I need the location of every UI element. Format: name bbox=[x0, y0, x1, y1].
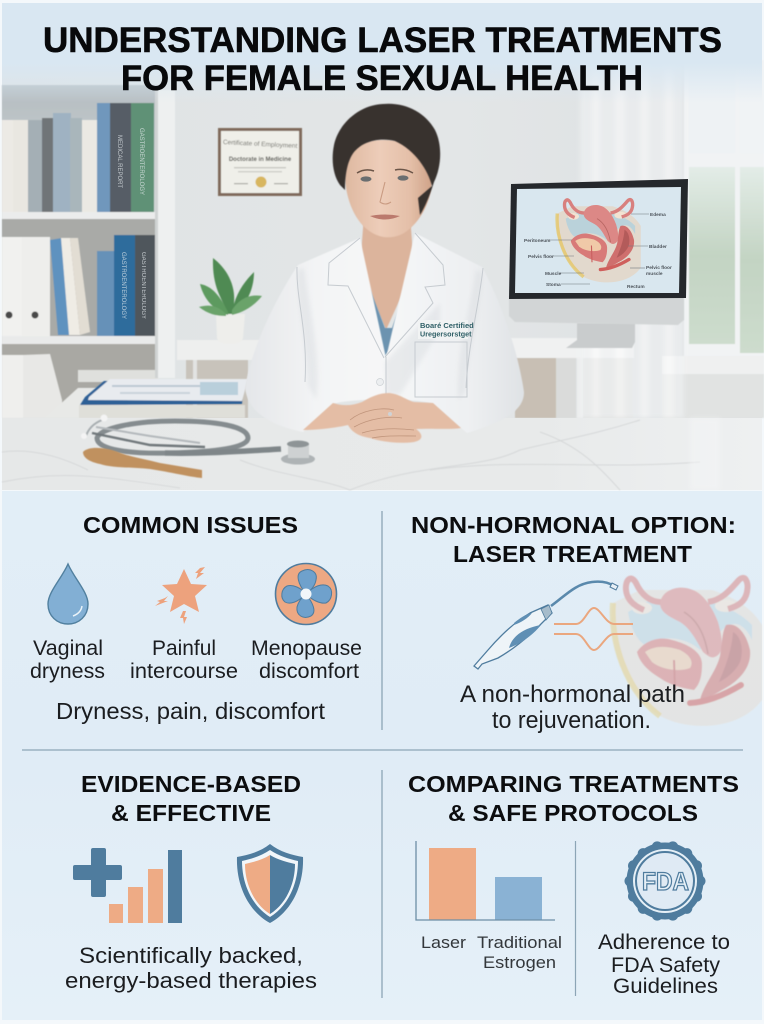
caption: FDA Safety bbox=[611, 954, 721, 977]
caption: A non-hormonal path bbox=[460, 681, 685, 708]
panel: evidence-based bbox=[65, 771, 317, 993]
heading bbox=[408, 771, 739, 826]
coat badge: Boaré Certified bbox=[420, 321, 474, 330]
heading: & SAFE PROTOCOLS bbox=[448, 800, 698, 826]
framed certificate: Certificate of Employment bbox=[223, 139, 298, 150]
icon labels: Vaginal bbox=[33, 637, 103, 660]
bar chart bbox=[416, 841, 555, 920]
panel: non-hormonal option bbox=[411, 512, 762, 734]
bookshelf bbox=[2, 85, 175, 418]
coat lapels and pocket bbox=[297, 233, 483, 403]
chart labels: Estrogen bbox=[483, 953, 556, 972]
screen labels: Rectum bbox=[627, 284, 645, 290]
neck bbox=[360, 215, 414, 330]
heading: COMPARING TREATMENTS bbox=[408, 771, 739, 797]
folded hands bbox=[303, 393, 461, 443]
heading: NON-HORMONAL OPTION: bbox=[411, 512, 736, 538]
chart labels: Traditional bbox=[477, 933, 562, 952]
book spine text: GASTROENTEROLOGY bbox=[140, 252, 146, 319]
icon labels: Painful bbox=[152, 637, 216, 660]
monitor screen bbox=[515, 187, 681, 293]
screen labels: Pelvis floor bbox=[528, 254, 554, 260]
caption: Guidelines bbox=[613, 975, 718, 998]
chart labels: Laser bbox=[421, 933, 466, 952]
heading: & EFFECTIVE bbox=[111, 800, 271, 826]
hero photo: clinic scene bbox=[2, 3, 764, 490]
monitor bezel bbox=[509, 179, 688, 299]
stethoscope bbox=[81, 414, 315, 464]
screen labels: Stoma bbox=[546, 282, 561, 288]
heading: LASER TREATMENT bbox=[453, 541, 693, 567]
anatomy diagram on screen bbox=[557, 200, 641, 282]
potted plant bbox=[199, 258, 262, 344]
heading: COMMON ISSUES bbox=[83, 512, 298, 538]
icon labels: discomfort bbox=[259, 660, 359, 683]
face bbox=[345, 140, 432, 237]
white coat bbox=[245, 233, 524, 433]
icon labels: dryness bbox=[30, 660, 105, 683]
caption bbox=[460, 681, 685, 734]
facial features bbox=[357, 169, 413, 220]
back wall bbox=[2, 60, 762, 420]
faded anatomy illustration bbox=[612, 578, 762, 726]
icon: medical cross bbox=[73, 848, 122, 897]
screen labels: muscle bbox=[646, 271, 663, 277]
book spine text: GASTROENTEROLOGY bbox=[120, 252, 126, 319]
folder stack on desk bbox=[79, 379, 248, 418]
icon: FDA seal bbox=[624, 841, 706, 921]
doctor bbox=[245, 104, 524, 443]
caption: to rejuvenation. bbox=[492, 707, 651, 734]
caption: energy-based therapies bbox=[65, 968, 317, 993]
marble countertop bbox=[2, 418, 762, 490]
icon labels: Menopause bbox=[251, 637, 362, 660]
screen labels bbox=[524, 212, 672, 290]
screen labels: Muscle bbox=[545, 271, 562, 277]
caption: Adherence to bbox=[598, 931, 730, 954]
icon: water drop bbox=[48, 564, 88, 624]
title: UNDERSTANDING LASER TREATMENTS bbox=[43, 21, 722, 60]
coat badge: Uregersorstget bbox=[420, 330, 472, 338]
section dividers bbox=[22, 511, 743, 998]
summary text: Dryness, pain, discomfort bbox=[56, 698, 326, 724]
chart labels bbox=[421, 933, 562, 972]
caption bbox=[65, 943, 317, 993]
title bbox=[43, 21, 722, 98]
coat badge bbox=[418, 320, 474, 339]
heading: EVIDENCE-BASED bbox=[81, 771, 301, 797]
monitor stand bbox=[566, 323, 635, 348]
framed certificate: Doctorate in Medicine bbox=[229, 157, 292, 163]
panel: common issues bbox=[30, 512, 362, 724]
icon: laser handpiece bbox=[474, 582, 618, 669]
scrub top bbox=[362, 268, 419, 358]
icon: pain star bbox=[155, 567, 207, 624]
icon: rising bars bbox=[109, 850, 182, 923]
top fade into title band bbox=[2, 3, 762, 103]
side tables bbox=[177, 338, 634, 418]
book spine text: GASTROENTEROLOGY bbox=[138, 128, 144, 195]
book spine text bbox=[116, 128, 146, 319]
title: FOR FEMALE SEXUAL HEALTH bbox=[121, 59, 643, 98]
lower information panel background bbox=[2, 491, 762, 1020]
screen labels: Bladder bbox=[649, 244, 667, 250]
panel: comparing treatments bbox=[408, 771, 739, 998]
icon labels bbox=[30, 637, 362, 683]
window bbox=[662, 60, 764, 418]
icon: shield bbox=[237, 844, 303, 923]
caption: Scientifically backed, bbox=[79, 943, 303, 968]
screen labels: Edema bbox=[650, 212, 666, 218]
finger lines bbox=[350, 409, 416, 438]
icon: fan bbox=[276, 564, 336, 624]
monitor with anatomy diagram bbox=[509, 179, 688, 348]
hair bbox=[333, 104, 440, 215]
screen labels: Pelvic floor bbox=[646, 265, 672, 271]
laser waves bbox=[554, 608, 633, 650]
coat button bbox=[376, 378, 384, 386]
inner divider bbox=[574, 841, 576, 996]
screen labels: Peritoneum bbox=[524, 238, 550, 244]
monitor chin bbox=[509, 296, 684, 325]
book spine text: MEDICAL REPORT bbox=[116, 135, 122, 188]
icon labels: intercourse bbox=[130, 660, 238, 683]
curtain bbox=[580, 60, 684, 418]
heading bbox=[81, 771, 301, 826]
wooden spoon bbox=[83, 448, 202, 478]
heading bbox=[411, 512, 736, 567]
framed certificate bbox=[218, 128, 302, 196]
icon: FDA seal: FDA bbox=[642, 868, 689, 896]
caption bbox=[598, 931, 730, 998]
wedding ring bbox=[388, 412, 392, 416]
coat shading bbox=[298, 268, 482, 400]
